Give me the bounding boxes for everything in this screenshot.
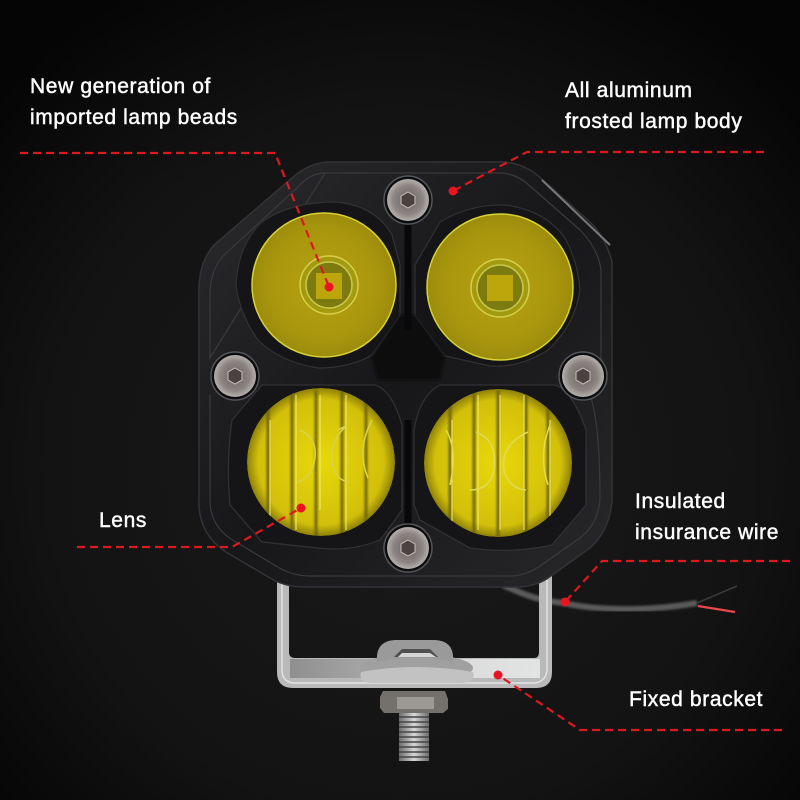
reflector: top left xyxy=(252,213,396,357)
callout: wire xyxy=(560,490,790,606)
callout: wire: insurance wire xyxy=(635,521,779,544)
callout: lamp beads: New generation of xyxy=(30,75,211,98)
mounting bracket xyxy=(277,575,552,761)
bolts xyxy=(211,176,607,572)
fog lens: bottom left xyxy=(247,388,395,540)
lamp recess panels xyxy=(228,202,586,550)
callout: lamp beads xyxy=(20,75,334,292)
callout: wire: Insulated xyxy=(635,490,726,513)
bolt assembly xyxy=(359,640,473,761)
callout: lamp body: All aluminum xyxy=(565,79,693,102)
callout: lamp body xyxy=(448,79,764,196)
callout: lens xyxy=(77,504,306,547)
callout: lamp beads: imported lamp beads xyxy=(30,106,238,129)
callout: lens: Lens xyxy=(99,509,147,532)
lamp housing xyxy=(199,162,612,587)
fog lens: bottom right xyxy=(424,389,572,540)
cable xyxy=(503,585,737,612)
reflector: top right xyxy=(427,214,573,360)
callout: bracket: Fixed bracket xyxy=(629,688,763,711)
callout: bracket xyxy=(494,670,782,730)
callout: lamp body: frosted lamp body xyxy=(565,110,742,133)
